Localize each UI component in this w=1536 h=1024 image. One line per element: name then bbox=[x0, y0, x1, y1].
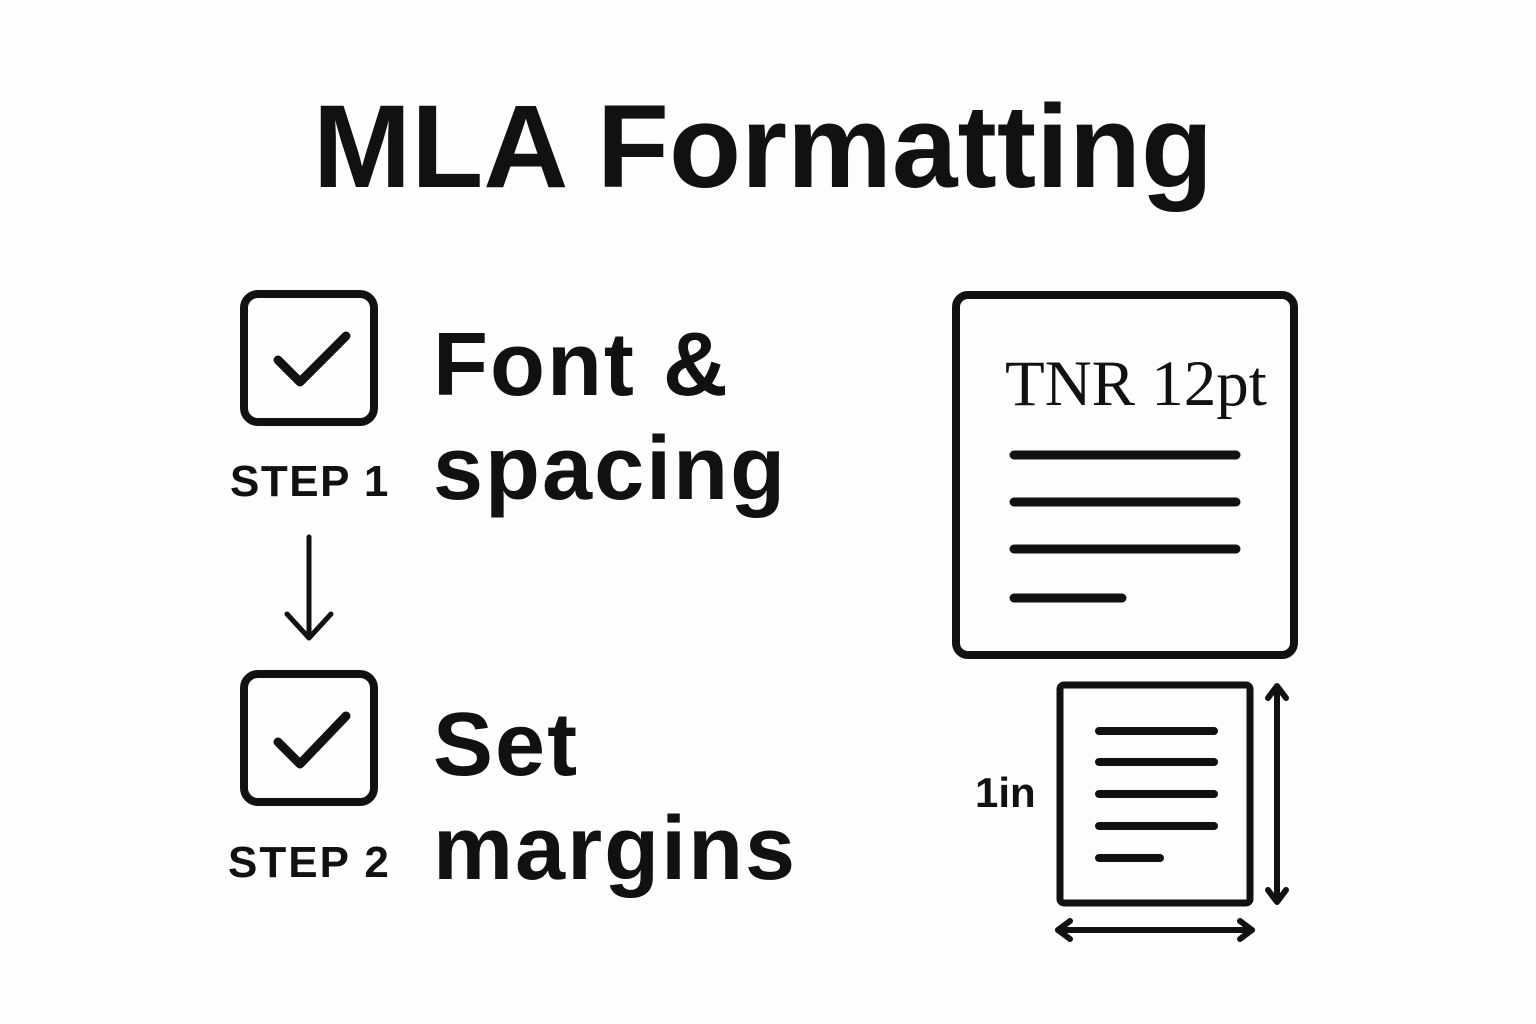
document: font sample bbox=[956, 295, 1294, 655]
step 2 heading: margins bbox=[433, 799, 797, 899]
margin label: 1in bbox=[975, 769, 1036, 816]
document: font sample: TNR 12pt bbox=[1005, 348, 1267, 420]
step 2 heading bbox=[433, 695, 797, 899]
title: MLA Formatting bbox=[313, 81, 1213, 213]
icon: checkbox step 2 bbox=[244, 674, 374, 802]
step 1 heading: spacing bbox=[433, 419, 787, 519]
step 2 label: STEP 2 bbox=[228, 838, 391, 887]
arrow: horizontal margin bbox=[1058, 921, 1252, 939]
step 1 label: STEP 1 bbox=[230, 457, 390, 506]
step 1 heading: Font & bbox=[433, 315, 730, 415]
icon: checkbox step 1 bbox=[244, 294, 374, 422]
arrow: vertical margin bbox=[1268, 686, 1286, 902]
arrow: step 1 to step 2 bbox=[287, 537, 331, 638]
step 1 heading bbox=[433, 315, 787, 519]
step 2 heading: Set bbox=[433, 695, 579, 795]
document: margins bbox=[1060, 685, 1250, 903]
